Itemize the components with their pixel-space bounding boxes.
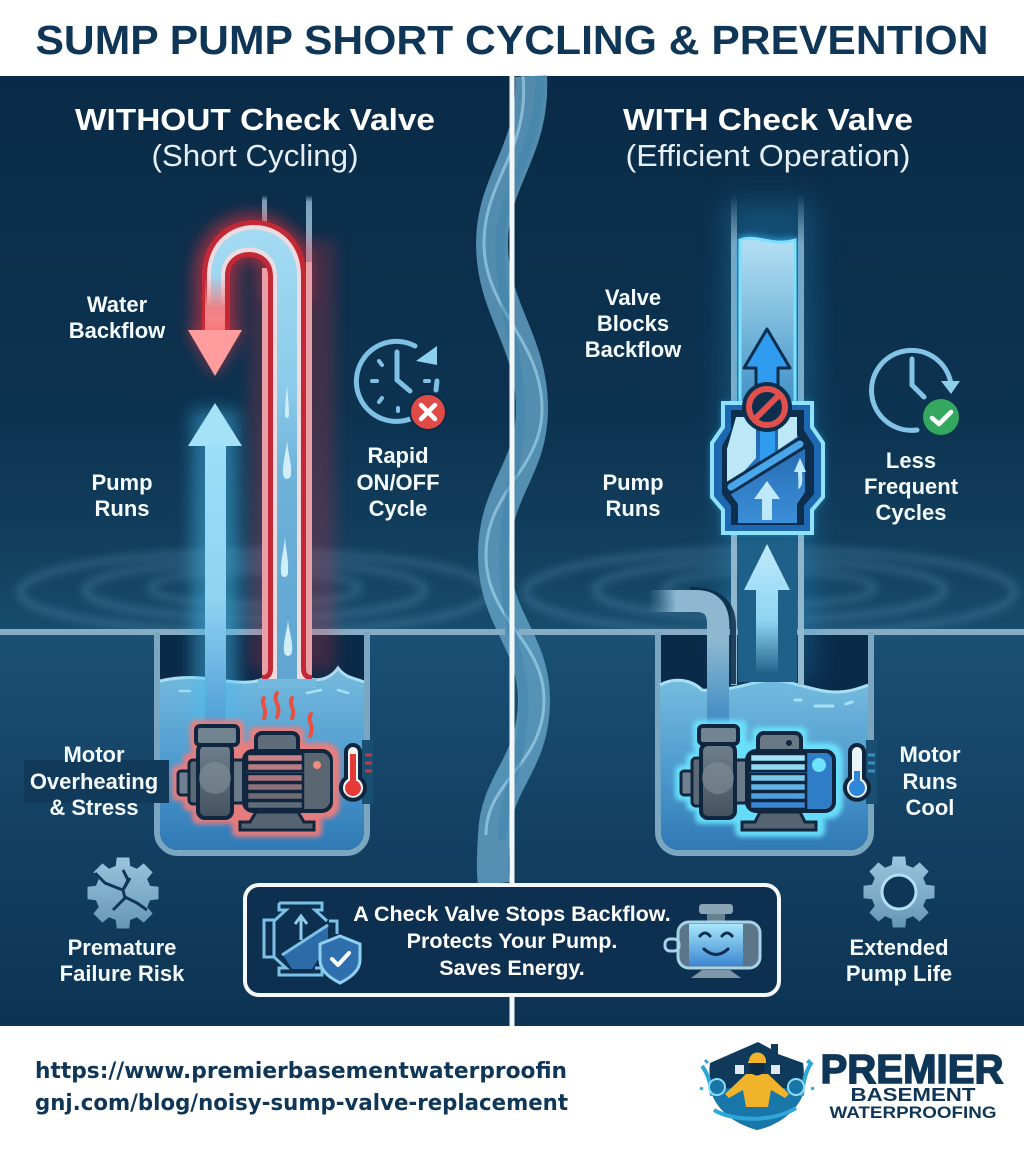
clock: rapid cycle xyxy=(356,341,437,421)
label: pump runs: Pump xyxy=(91,470,153,495)
label: premature failure risk: Premature xyxy=(68,935,176,960)
icon: gear xyxy=(864,856,934,928)
label: extended pump life: Pump Life xyxy=(846,961,952,986)
arrow: backflow down xyxy=(188,330,242,376)
label: motor overheating: Motor xyxy=(63,742,125,767)
callout text: Saves Energy. xyxy=(439,956,585,980)
water drips xyxy=(281,385,292,656)
hot pump xyxy=(178,726,334,831)
clock: less frequent xyxy=(872,350,960,430)
label: water backflow: Water xyxy=(87,292,148,317)
label: rapid cycle: Rapid xyxy=(367,443,429,468)
check valve body xyxy=(712,403,823,533)
central water ribbon xyxy=(484,76,544,884)
center divider xyxy=(510,76,514,1026)
label: pump runs: Runs xyxy=(94,496,150,521)
icon: broken gear xyxy=(88,858,158,928)
label: motor runs cool: Motor xyxy=(899,742,961,767)
logo wordmark xyxy=(820,1046,1004,1122)
icon: no symbol xyxy=(742,382,792,432)
arrow: blocked flow xyxy=(744,329,790,450)
water ripples xyxy=(20,550,1015,634)
label: motor runs cool: Runs xyxy=(902,769,958,794)
icon: valve with shield xyxy=(264,903,360,983)
logo xyxy=(700,1042,1004,1130)
logo wordmark: PREMIER xyxy=(820,1046,1004,1092)
source url: gnj.com/blog/noisy-sump-valve-replacement xyxy=(35,1090,568,1116)
label: extended pump life: Extended xyxy=(849,935,949,960)
sump pit xyxy=(0,629,505,853)
badge: error xyxy=(410,394,446,430)
label: motor overheating: Overheating xyxy=(30,769,158,794)
heading: with check valve: WITH Check Valve xyxy=(623,102,913,137)
logo emblem xyxy=(700,1042,814,1130)
cool pump xyxy=(681,726,837,831)
vertical pipe with guide rails xyxy=(724,195,814,685)
callout xyxy=(245,885,779,995)
heat waves xyxy=(263,693,312,736)
heading: with check valve xyxy=(623,102,913,173)
label: less frequent cycles: Cycles xyxy=(876,500,946,525)
label: water backflow: Backflow xyxy=(69,318,166,343)
label: rapid cycle: Cycle xyxy=(369,496,427,521)
label: valve blocks backflow: Blocks xyxy=(597,311,669,336)
label: motor overheating: & Stress xyxy=(49,795,139,820)
callout text: Protects Your Pump. xyxy=(407,929,617,953)
label: motor runs cool: Cool xyxy=(906,795,954,820)
title: SUMP PUMP SHORT CYCLING & PREVENTION xyxy=(36,17,988,63)
heading: without check valve: WITHOUT Check Valve xyxy=(75,102,435,137)
thermometer hot xyxy=(341,740,373,804)
label: motor overheating xyxy=(24,742,169,820)
callout text: A Check Valve Stops Backflow. xyxy=(353,902,671,926)
heading: with check valve: (Efficient Operation) xyxy=(626,138,910,173)
valve disc xyxy=(729,443,802,488)
arrow: flow up xyxy=(744,544,790,672)
small flow arrows xyxy=(754,458,806,520)
label: less frequent cycles: Less xyxy=(886,448,936,473)
source url: https://www.premierbasementwaterproofin xyxy=(35,1058,567,1084)
icon: happy pump xyxy=(665,904,760,978)
label: rapid cycle: ON/OFF xyxy=(356,470,440,495)
label: pump runs: Pump xyxy=(602,470,664,495)
label: pump runs: Runs xyxy=(606,496,660,521)
sump pit xyxy=(519,629,1024,853)
label: less frequent cycles: Frequent xyxy=(864,474,959,499)
arrow: pump up xyxy=(188,403,242,730)
panel: with check valve xyxy=(519,102,1024,986)
label: valve blocks backflow: Backflow xyxy=(585,337,682,362)
thermometer cool xyxy=(845,740,877,804)
heading: without check valve xyxy=(75,102,435,173)
panel: without check valve xyxy=(0,102,505,986)
badge: check xyxy=(923,399,959,435)
logo wordmark: WATERPROOFING xyxy=(830,1103,996,1122)
glowing water column xyxy=(738,236,796,405)
label: premature failure risk: Failure Risk xyxy=(60,961,185,986)
pipe guide rails xyxy=(262,195,312,265)
label: valve blocks backflow: Valve xyxy=(605,285,661,310)
backflow u-bend pipe with red glow xyxy=(205,225,335,688)
pump discharge pipe xyxy=(648,590,733,728)
logo wordmark: BASEMENT xyxy=(850,1085,976,1105)
heading: without check valve: (Short Cycling) xyxy=(152,138,358,173)
